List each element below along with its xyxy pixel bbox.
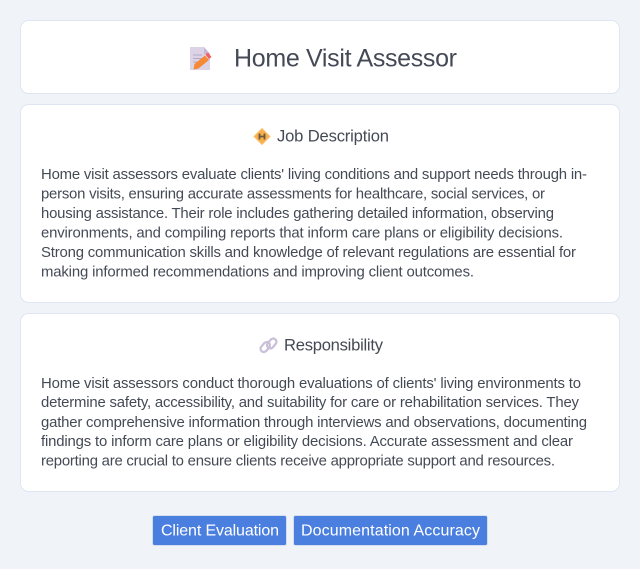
text: job description body: person visits, ensuring accurate assessments for healthcare, social services, or xyxy=(41,186,545,202)
panel: responsibility xyxy=(20,314,620,492)
text: job description body: Strong communication skills and knowledge of relevant regulations are essential for xyxy=(41,245,576,261)
text: responsibility body xyxy=(41,376,587,470)
icon: chain link xyxy=(259,337,278,353)
text: job description body xyxy=(41,167,587,280)
panel: job description xyxy=(20,104,620,302)
heading: job description: Job Description xyxy=(277,126,389,146)
text: job description body: environments, and compiling reports that inform care plans or eligibility decisions. xyxy=(41,226,563,242)
text: responsibility body: findings to inform care plans or eligibility decisions. Accurate assessment and clear xyxy=(41,434,573,450)
text: responsibility body: determine safety, accessibility, and suitability for care or rehabilitation services. They xyxy=(41,395,580,411)
text: job description body: Home visit assessors evaluate clients' living conditions and support needs through in- xyxy=(41,167,587,183)
text: job description body: housing assistance. Their role includes gathering detailed information, observing xyxy=(41,206,554,222)
text: responsibility body: Home visit assessors conduct thorough evaluations of clients' living environments to xyxy=(41,376,581,392)
icon: document with pencil xyxy=(190,47,212,70)
text: job description body: making informed recommendations and improving client outcomes. xyxy=(41,264,474,280)
tag: documentation accuracy xyxy=(294,516,488,546)
text: responsibility body: reporting are crucial to ensure clients receive appropriate support and resources. xyxy=(41,454,555,470)
heading: responsibility: Responsibility xyxy=(284,336,384,354)
panel: title header xyxy=(20,20,620,94)
title: Home Visit Assessor xyxy=(234,44,457,72)
text: responsibility body: gather comprehensive information through interviews and observations, documenting xyxy=(41,415,587,431)
tag: documentation accuracy: Documentation Accuracy xyxy=(301,522,480,540)
icon: diamond road sign xyxy=(254,128,270,144)
tag: client evaluation xyxy=(152,516,286,546)
tag: client evaluation: Client Evaluation xyxy=(161,522,279,540)
